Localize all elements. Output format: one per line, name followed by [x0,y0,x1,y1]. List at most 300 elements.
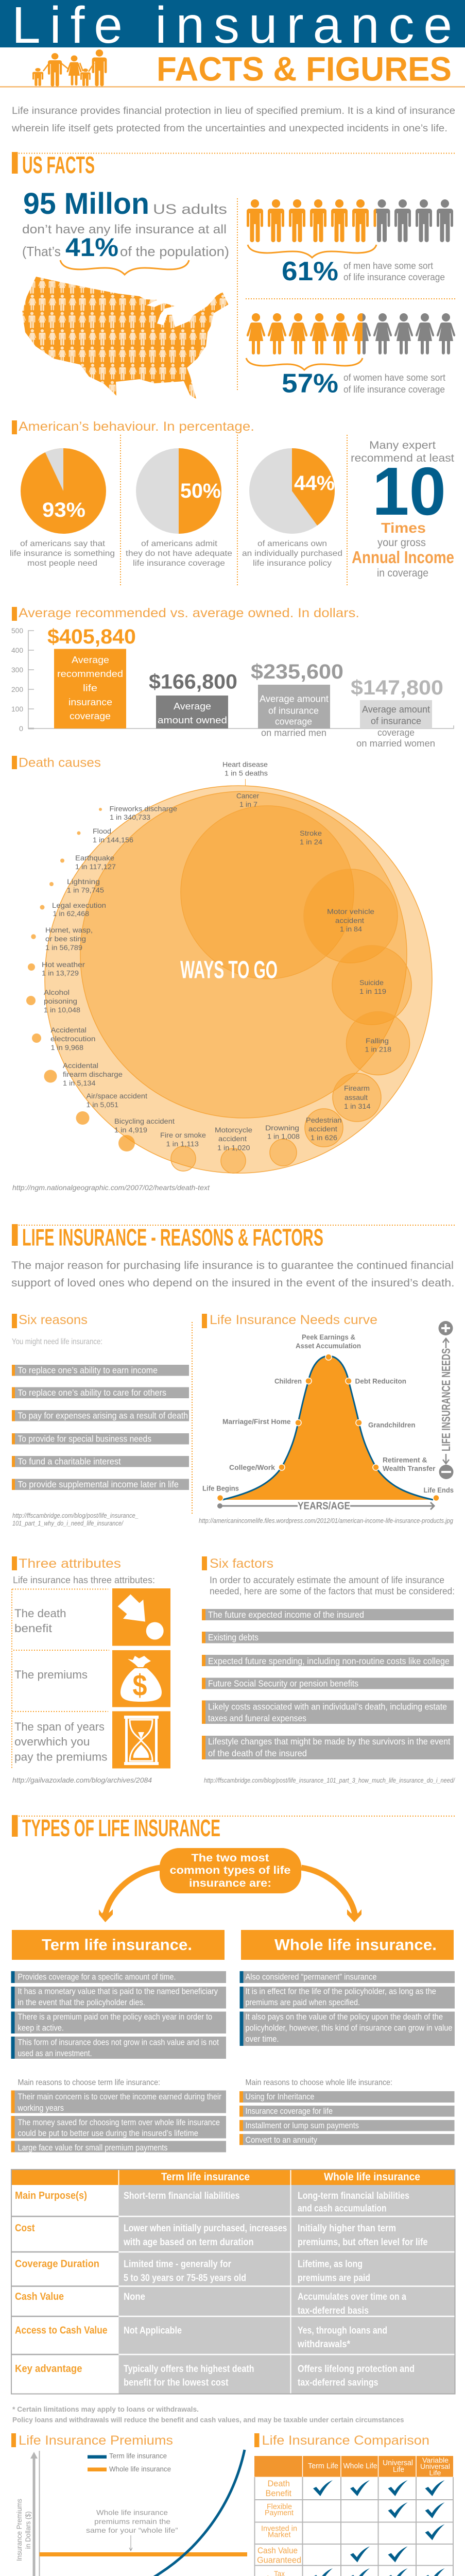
bubble labels: poisoning [44,997,77,1005]
intro paragraph [11,105,455,134]
whole column: and cash accumulation [298,2203,386,2214]
bubble labels: Motorcycle [215,1126,252,1134]
reasons paragraph: support of loved ones who depend on the insured in the event of the insured’s death. [11,1277,454,1289]
whole column: Initially higher than term [298,2223,396,2234]
panel: six factors: taxes and funeral expenses [208,1713,306,1723]
milestone labels: Marriage/First Home [222,1417,291,1426]
panel: six reasons: To provide for special business needs [18,1433,151,1444]
pie chart: 50 percent [136,448,221,534]
term features [11,1971,226,2059]
stat: 95 million adults uninsured: 95 Millon [23,187,149,221]
bubble labels: Flood [93,827,111,835]
panel: three attributes [12,1556,170,1784]
bubble labels: 1 in 7 [239,800,257,808]
center label: WAYS TO GO [180,956,278,984]
term column: None [124,2292,145,2302]
column headers: Universal [383,2459,413,2467]
source link: http://ngm.nationalgeographic.com/2007/02/hearts/death-text [12,1184,210,1192]
term features: used as an investment. [18,2049,92,2058]
pie captions: of americans own [257,539,327,548]
section heading: US facts [12,151,456,178]
bar: married men: on married men [261,727,326,738]
brace under men [248,245,376,258]
callout: ten times annual income [351,439,454,579]
source link: http://gailvazoxlade.com/blog/archives/2084 [12,1776,152,1784]
whole reasons [239,2091,454,2145]
subtitle: FACTS & FIGURES [157,49,452,88]
whole features [240,1971,455,2046]
bubble labels: Legal execution [52,901,106,909]
bubble labels: 1 in 10,048 [44,1006,80,1014]
whole column: Yes, through loans and [298,2326,387,2336]
bubble labels: 1 in 9,968 [50,1043,83,1052]
bubble labels: 1 in 5 deaths [225,769,268,777]
panel: term life [11,1930,226,2153]
stat: 95 million adults uninsured: don’t have any life insurance at all [22,223,227,236]
row labels: Cost [15,2223,35,2234]
panel: six factors: Likely costs associated with an individual’s death, including estate [208,1701,447,1711]
milestone labels: Life Begins [202,1484,239,1492]
callout: ten times annual income: Times [381,520,426,536]
bubble labels: Fireworks discharge [109,805,177,813]
whole column: withdrawals* [297,2339,351,2350]
pictogram: men 61 percent [247,199,453,242]
panel: six factors: of the death of the insured [208,1748,307,1758]
panel: comparison table [254,2433,453,2576]
callout: two most common types [160,1848,301,1893]
bubble labels: Suicide [359,978,384,987]
bubble labels: Motor vehicle [327,907,374,916]
column headers: Life [429,2469,441,2477]
bubble labels: 1 in 62,468 [53,909,89,918]
panel: six reasons: To provide supplemental income later in life [18,1479,179,1489]
table header [161,2171,420,2183]
term reasons: The money saved for choosing term over whole life insurance [18,2118,220,2127]
whole features: Also considered “permanent” insurance [245,1972,377,1981]
bubble labels: 1 in 24 [300,838,322,846]
arrow: needs axis: LIFE INSURANCE NEEDS [439,1348,453,1451]
heading: Life Insurance Premiums [19,2433,173,2448]
bar: recommended [47,625,136,728]
stat: 95 million adults uninsured: (That’s [22,244,61,259]
title box [12,1930,225,1960]
column headers: Term Life [308,2462,338,2470]
axis labels: 500 [11,626,23,635]
term reasons [11,2091,226,2153]
bubble labels: 1 in 84 [340,925,362,933]
pie captions: most people need [27,559,97,568]
bar: owned [149,671,237,728]
bubble labels: Cancer [236,791,259,800]
milestone labels: Life Ends [423,1486,454,1494]
row labels: Key advantage [15,2363,82,2375]
axes: Insurance Premiums [15,2499,23,2561]
bubble labels: 1 in 340,733 [110,813,150,821]
chart axes [28,631,454,728]
bubble labels: Firearm [344,1084,370,1092]
bubble labels: Stroke [300,829,322,837]
heading: Life Insurance Needs curve [210,1313,377,1327]
term features: keep it active. [18,2024,64,2033]
bar: married men [251,660,343,738]
panel: six reasons: To replace one’s ability to earn income [18,1365,158,1376]
source link: 101_part_1_why_do_i_need_life_insurance/ [12,1519,124,1527]
whole column: Lifetime, as long [298,2259,363,2270]
stat: 61 percent of men [282,257,445,286]
bubble labels: Pedestrian [306,1116,342,1124]
bubble labels: Falling [366,1037,389,1045]
term features: It has a monetary value that is paid to the named beneficiary [18,1987,218,1996]
attribute: death benefit [14,1588,170,1646]
bubble labels: or bee sting [45,935,86,943]
term column: 5 to 30 years or 75-85 years old [124,2273,246,2283]
callout: ten times annual income: your gross [377,537,426,549]
term features: This form of insurance does not grow in cash value and is not [18,2038,219,2047]
bar: recommended: life [83,683,97,693]
attribute: premiums: $ [133,1669,147,1702]
source link [12,1512,139,1527]
bubble labels: Accidental [63,1061,98,1070]
pie captions: life insurance policy [253,559,332,568]
milestone labels: Wealth Transfer [383,1464,436,1472]
whole column: premiums are paid [298,2273,370,2283]
term reasons: Large face value for small premium payments [18,2143,168,2153]
bubble labels: Alcohol [44,988,70,996]
whole column [297,2191,427,2388]
table: term vs whole life [11,2169,455,2394]
axes: in Dollars ($) [24,2511,32,2549]
pie captions [10,539,342,568]
icon: family silhouette [32,49,107,87]
heading: Six factors [210,1556,273,1571]
term column: Limited time - generally for [124,2259,232,2270]
bar: married men: $235,600 [251,660,343,683]
bubble labels: 1 in 117,127 [75,862,116,871]
axes [15,2451,248,2576]
panel: term life: Main reasons to choose term life insurance: [18,2078,160,2087]
column headers: Universal [420,2462,450,2470]
column headers [308,2456,450,2477]
bubble labels: 1 in 119 [359,987,386,995]
stat: 61 percent of men: 61% [282,257,338,286]
callout: two most common types: common types of life [170,1865,290,1876]
US map made of people [22,277,229,399]
pie captions: of americans say that [20,539,106,548]
bubble labels: 1 in 626 [311,1133,337,1142]
column headers: Variable [422,2456,449,2464]
bubble labels: 1 in 144,156 [93,836,133,844]
legend: Whole life insurance [109,2465,171,2473]
bubble labels: Drowning [265,1124,299,1132]
callout: ten times annual income: recommend at least [351,452,454,464]
whole features: premiums are paid when specified. [245,1998,360,2007]
section heading: US facts: US FACTS [22,151,95,178]
term column: Short-term financial liabilities [124,2191,240,2201]
bubble labels: firearm discharge [63,1070,123,1078]
arrow: to whole life [301,1868,361,1922]
term column: Typically offers the highest death [124,2364,254,2375]
panel: six factors: The future expected income of the insured [208,1609,364,1620]
stat: 61 percent of men: of life insurance coverage [343,272,445,282]
attribute: span of years: overwhich you [14,1735,90,1748]
pie chart: 44 percent [249,448,335,534]
row labels: Main Purpose(s) [15,2190,87,2201]
term column: Lower when initially purchased, increases [124,2223,287,2234]
pie captions: life insurance coverage [133,559,225,568]
pie captions: of americans admit [141,539,218,548]
bubble labels: 1 in 1,008 [267,1132,300,1141]
panel: six factors [202,1556,455,1784]
annotation: premiums remain the [94,2517,170,2526]
title box [241,1930,454,1960]
bubble labels: Hot weather [42,960,85,969]
whole column: Offers lifelong protection and [298,2364,415,2375]
bubble labels: accident [308,1125,337,1133]
bubbles [45,786,432,1173]
heading: American's behaviour: American’s behaviour. In percentage. [19,419,254,434]
panel: six reasons: To pay for expenses arising as a result of death [18,1411,188,1421]
title box: Term life insurance. [42,1936,192,1954]
bubble labels: Bicycling accident [114,1117,175,1125]
pie captions: an individually purchased [242,549,342,558]
panel: six factors: Lifestyle changes that might be made by the survivors in the event [208,1736,451,1747]
bar: married women: $147,800 [351,676,443,699]
panel: six factors: Future Social Security or pension benefits [208,1679,358,1689]
bubble labels: 1 in 1,113 [166,1140,199,1148]
row labels: Cash Value [15,2291,64,2302]
bubble labels: Accidental [50,1026,87,1034]
stat: 57 percent of women: of women have some sort [343,372,445,383]
whole features: over time. [245,2035,279,2044]
stat: 95 million adults uninsured: US adults [153,201,227,217]
bubble labels: 1 in 1,020 [217,1144,250,1152]
panel: six factors: Existing debts [208,1632,259,1642]
panel: six reasons: To fund a charitable interest [18,1456,121,1466]
term column: with age based on term duration [123,2237,253,2248]
pie chart: 44 percent: 44% [294,472,335,495]
stat: 57 percent of women: of life insurance coverage [343,384,445,395]
intro paragraph: wherein life itself gets protected from the uncertainties and unexpected incidents in one’s life. [11,123,447,134]
attribute: death benefit: The death [14,1607,66,1620]
bubble labels: Heart disease [222,760,268,769]
milestone labels: Grandchildren [368,1421,415,1429]
axis labels: 300 [11,666,23,674]
stat: 57 percent of women: 57% [282,369,338,399]
milestone labels: College/Work [229,1463,275,1471]
attribute: span of years: The span of years [14,1720,105,1733]
row labels [15,2190,107,2375]
heading: Six reasons [19,1313,88,1327]
row labels: Market [268,2531,291,2539]
reasons paragraph [11,1260,454,1289]
panel: premiums chart [11,2433,248,2576]
row labels: Benefit [266,2489,291,2498]
annotation: same for your “whole life” [86,2526,178,2534]
intro paragraph: Life insurance provides financial protection in lieu of specified premium. It is a kind of insurance [12,105,455,116]
milestone labels: Peek Earnings & [302,1333,355,1341]
panel: six reasons: You might need life insurance: [12,1337,102,1346]
bubble labels: 1 in 79,745 [67,886,104,894]
stat: 57 percent of women [282,369,445,399]
pie chart: 50 percent: 50% [180,480,221,502]
attribute: span of years: pay the premiums [14,1751,107,1763]
milestone labels: Debt Reduciton [355,1377,406,1385]
bubble labels: 1 in 56,789 [45,943,82,952]
pie captions: they do not have adequate [126,549,232,558]
heading: death causes: Death causes [19,755,101,770]
whole column: premiums, but often level for life [298,2237,427,2248]
source link: http://ffscambridge.com/blog/post/life_insurance_ [12,1512,139,1519]
stat: 61 percent of men: of men have some sort [343,261,433,271]
bar: married men: coverage [275,716,312,726]
bubble labels: Hornet, wasp, [45,926,93,934]
reasons paragraph: The major reason for purchasing life insurance is to guarantee the continued financial [11,1260,454,1272]
bubble labels: 1 in 314 [344,1102,371,1110]
annotation: Whole life insurance [96,2508,168,2516]
bubble labels: Fire or smoke [160,1131,206,1139]
axis labels: 0 [19,724,23,733]
arrow: to term life [99,1868,160,1922]
row labels: Guaranteed [257,2555,301,2565]
callout: two most common types: insurance are: [189,1877,271,1889]
whole life line [39,2552,247,2556]
axis labels: 100 [11,705,23,713]
callout: ten times annual income: 10 [372,453,446,529]
pie captions: life insurance is something [10,549,115,558]
annotation [86,2508,178,2551]
arrow: years axis: YEARS/AGE [298,1500,350,1512]
brace under women [246,358,363,370]
panel: six factors: needed, here are some of the factors that must be considered: [210,1586,455,1596]
term features: in the event that the policyholder dies. [18,1998,145,2007]
callout: two most common types: The two most [192,1852,269,1864]
bubble labels: accident [335,916,364,924]
whole reasons: Installment or lump sum payments [245,2121,359,2130]
bar: married men: Average amount [260,693,329,704]
term reasons: Their main concern is to cover the income earned during their [18,2092,221,2102]
heading: Life Insurance Comparison [262,2433,429,2448]
brace over map [60,260,189,275]
bar: owned: amount owned [158,715,227,725]
panel: six reasons: To replace one’s ability to care for others [18,1387,166,1398]
milestones [217,1354,439,1501]
stat: 95 million adults uninsured: of the population) [120,244,229,259]
axis labels [11,626,23,733]
title box: Whole life insurance. [274,1936,437,1954]
bar: recommended: Average [72,655,109,665]
column headers: Life [393,2465,404,2474]
pie chart: 93 percent: 93% [42,499,85,521]
bubble labels: 1 in 13,729 [42,969,79,977]
pie chart: 93 percent [21,448,106,534]
whole features: It also pays on the value of the policy upon the death of the [245,2012,443,2022]
bar: recommended: insurance [68,697,112,707]
row labels: Flexible [267,2502,292,2511]
row labels: Cash Value [257,2546,298,2555]
bar chart: dollars [11,625,454,749]
row labels: Death [268,2479,290,2488]
term life curve [41,2450,245,2576]
term reasons: could be put to better use during the insured’s lifetime [18,2129,198,2138]
bubble labels: 1 in 5,051 [87,1100,118,1109]
bubble labels [42,760,391,1152]
bubble labels: electrocution [50,1035,96,1043]
bar: recommended: coverage [70,711,111,721]
bar: recommended: recommended [57,669,123,679]
row labels: Invested in [261,2524,297,2533]
whole column: tax-deferred savings [298,2377,378,2388]
table header: Whole life insurance [324,2171,420,2183]
bubble chart: death causes [26,760,432,1173]
whole reasons: Insurance coverage for life [245,2107,333,2116]
term column [123,2191,287,2388]
whole column: Long-term financial labilities [298,2191,409,2201]
stat: 95 million adults uninsured: 41% [65,233,118,262]
check marks [313,2480,445,2576]
legend [88,2451,171,2473]
factor bars [202,1609,454,1759]
bar: married women: coverage [377,727,415,738]
term features: There is a premium paid on the policy each year in order to [18,2012,212,2022]
whole reasons: Using for Inheritance [245,2092,314,2102]
panel: six factors: Expected future spending, including non-routine costs like college [208,1656,450,1666]
bar: married women: on married women [356,738,435,749]
column headers: Whole Life [343,2462,377,2470]
heading: average recommended vs owned: Average recommended vs. average owned. In dollars. [19,606,359,620]
whole reasons: Convert to an annuity [245,2136,318,2145]
bar: recommended: $405,840 [47,625,136,648]
bar: married men: of insurance [268,706,319,716]
stat: 95 million adults uninsured [22,187,229,262]
panel: whole life: Main reasons to choose whole life insurance: [245,2078,392,2087]
bar: owned: $166,800 [149,671,237,693]
attribute: span of years [14,1711,170,1768]
legend: Term life insurance [109,2451,167,2460]
milestone labels: Asset Accumulation [296,1342,361,1350]
reason bars [12,1365,189,1490]
pictogram: women 57 percent [247,313,455,354]
bubble labels: Air/space accident [87,1092,147,1100]
bar: owned: Average [174,701,211,711]
panel: needs curve [199,1313,454,1524]
axis labels: 400 [11,646,23,654]
milestone labels [202,1333,454,1494]
whole features: It is in effect for the life of the policyholder, as long as the [245,1987,436,1996]
bubble labels: 1 in 5,134 [63,1079,96,1087]
footnote [12,2405,404,2424]
panel: whole life [239,1930,455,2145]
section heading: types of life insurance: TYPES OF LIFE INSURANCE [22,1815,220,1841]
row labels: Coverage Duration [15,2259,99,2270]
bubble labels: Earthquake [75,854,114,862]
axis labels: 200 [11,685,23,693]
row labels [257,2479,301,2576]
table header: Term life insurance [161,2171,250,2183]
arrow: needs axis [439,1321,453,1479]
bubble labels: 1 in 218 [365,1045,391,1053]
callout: ten times annual income: Many expert [369,439,436,451]
curve [222,1356,433,1500]
attribute: premiums [14,1650,170,1707]
bar: married women: Average amount [362,704,430,715]
milestone labels: Children [274,1377,302,1385]
bubble labels: assault [345,1093,368,1101]
bubble labels: 1 in 4,919 [114,1126,147,1134]
bubble labels: Lightning [67,877,100,886]
panel: three attributes: Life insurance has three attributes: [13,1575,155,1585]
footnote: Policy loans and withdrawals will reduce the benefit and cash values, and may be taxable under certain circumstances [12,2415,404,2424]
whole column: tax-deferred basis [298,2306,369,2316]
